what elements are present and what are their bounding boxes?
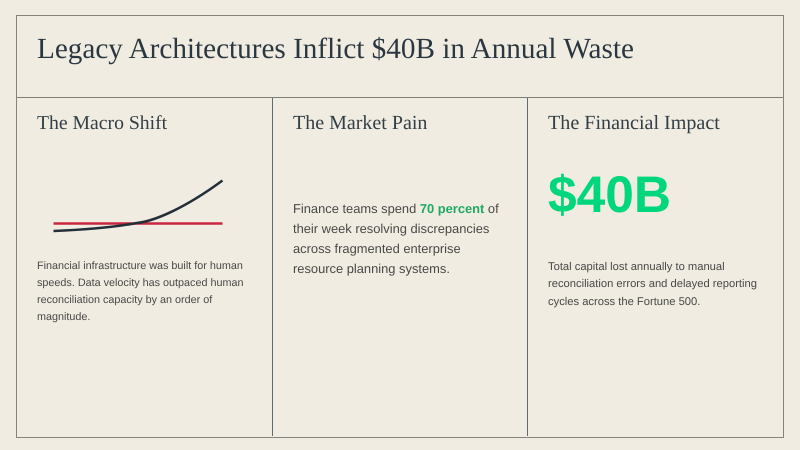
text: market pain description: Finance teams spend 70 percent of [293,201,499,216]
panel: the macro shift [37,112,243,323]
curve: data velocity [54,180,222,231]
text: macro shift description [37,260,243,323]
text: macro shift description: speeds. Data velocity has outpaced human [37,277,243,289]
line: human capacity [54,222,222,225]
text: financial impact description: cycles across the Fortune 500. [548,296,700,308]
text: market pain description: across fragmented enterprise [293,241,461,256]
divider: column one [272,98,273,436]
text: macro shift description: reconciliation capacity by an order of [37,294,212,306]
text: market pain description [293,201,499,276]
heading: the macro shift: The Macro Shift [37,112,167,134]
text: financial impact description [548,260,757,308]
text: financial impact description: Total capital lost annually to manual [548,260,725,272]
chart: data velocity versus human capacity [53,180,224,232]
divider: column two [527,98,528,436]
text: financial impact description: reconciliation errors and delayed reporting [548,278,757,290]
heading: the market pain: The Market Pain [293,112,427,134]
big number: $40B: $40B [548,165,671,223]
panel: the market pain [293,112,499,276]
text: macro shift description: magnitude. [37,311,90,323]
text: macro shift description: Financial infrastructure was built for human [37,260,243,272]
divider: header [17,97,783,98]
title: Legacy Architectures Inflict $40B in Annual Waste [37,33,634,65]
text: market pain description: their week resolving discrepancies [293,221,489,236]
heading: the financial impact: The Financial Impact [548,112,720,134]
panel: the financial impact [548,112,757,308]
text: market pain description: resource planning systems. [293,261,450,276]
